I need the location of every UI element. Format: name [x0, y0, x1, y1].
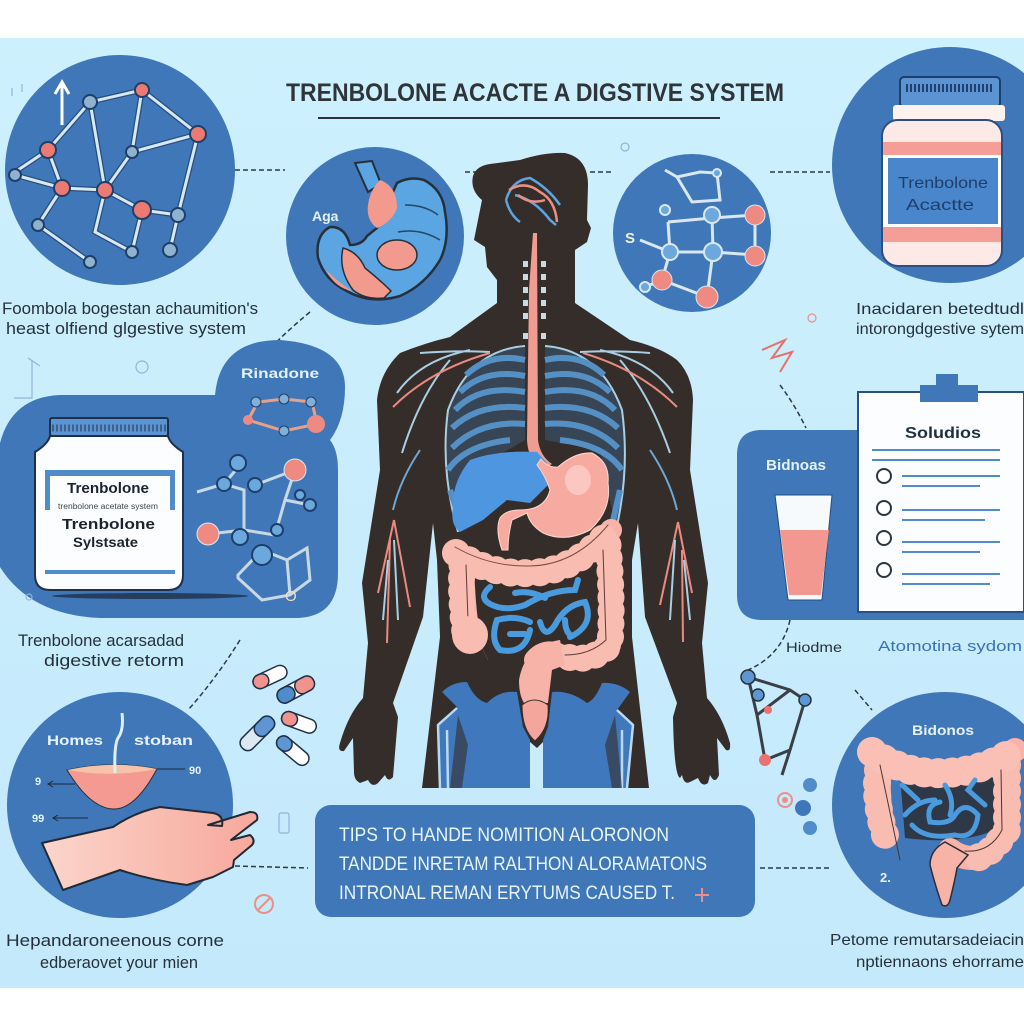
panel: intestine circle bottom right: Bidonos — [912, 722, 974, 738]
icon: brain — [506, 178, 560, 225]
connector lines — [188, 170, 872, 868]
decorative marks — [12, 84, 816, 833]
text: bottom right caption: nptiennaons ehorrame — [856, 954, 1024, 971]
neck vertebrae — [523, 261, 546, 339]
bottle label: trenbolone acetate system — [58, 502, 158, 511]
text: left caption: Trenbolone acarsadad — [18, 631, 184, 650]
esophagus — [527, 233, 552, 470]
panel: bottle circle top right — [832, 47, 1024, 283]
panel: hand circle bottom left — [7, 692, 257, 918]
panel: stomach circle: Aga — [312, 208, 339, 224]
bottle label: Trenbolone — [62, 516, 155, 533]
icon: molecule lower right — [741, 670, 811, 775]
text: bottom left caption: edberaovet your mien — [40, 953, 198, 972]
ribcage — [446, 346, 625, 532]
panel: bottle and molecules left: O — [285, 588, 297, 605]
shoulder and arm nerves — [378, 350, 692, 643]
text: right captions: Atomotina sydom — [878, 638, 1022, 655]
text: top right caption: intorongdgestive sytem — [856, 321, 1024, 338]
text: bottom left caption — [6, 931, 224, 972]
panel: molecule circle top left — [5, 55, 235, 285]
icon: zigzag — [762, 340, 792, 372]
panel: bottle circle top right: Acactte — [906, 197, 974, 214]
panel: molecule circle top centre-right — [613, 154, 771, 312]
text: right captions: Hiodme — [786, 639, 842, 655]
text: left caption — [18, 631, 184, 670]
liver — [452, 452, 550, 532]
icon: capsules — [237, 663, 318, 768]
large intestine — [455, 525, 611, 660]
panel: bottle and molecules left: Rinadone — [241, 365, 319, 381]
bottle label: Sylstsate — [73, 534, 138, 550]
panel: bottle and molecules left — [0, 340, 345, 618]
text: top left caption: Foombola bogestan achaumition's — [2, 299, 258, 318]
panel: molecule circle top centre-right: S — [625, 230, 635, 247]
gap between legs — [530, 742, 543, 788]
text: bottom left caption: Hepandaroneenous corne — [6, 931, 224, 950]
text: bottom right caption: Petome remutarsadeiacin — [830, 932, 1024, 949]
pelvis — [438, 682, 633, 788]
panel: tips box: TANDDE INRETAM RALTHON ALORAMATONS — [339, 854, 707, 875]
panel: bottle circle top right: Trenbolone — [898, 175, 988, 192]
panel: intestine circle bottom right — [832, 692, 1024, 918]
panel: tips box: TIPS TO HANDE NOMITION ALORONON — [339, 825, 669, 846]
title: TRENBOLONE ACACTE A DIGSTIVE SYSTEM — [286, 79, 784, 107]
clipboard — [858, 374, 1024, 612]
panel: tips box: INTRONAL REMAN ERYTUMS CAUSED T. — [339, 883, 675, 904]
text: left caption: digestive retorm — [44, 651, 184, 670]
panel: tips box — [315, 805, 755, 917]
panel: clipboard solutions right: Bidnoas — [766, 457, 826, 474]
panel: central body figure — [339, 153, 730, 788]
sigmoid colon — [519, 640, 565, 703]
panel: hand circle bottom left: stoban — [134, 732, 193, 748]
text: right captions — [786, 638, 1022, 655]
icon: small molecule and swirl — [778, 778, 817, 835]
panel: hand circle bottom left: 9 — [35, 776, 41, 788]
panel: hand circle bottom left: 99 — [32, 813, 44, 825]
text: top left caption: heast olfiend glgestive system — [6, 319, 246, 338]
clipboard: Soludios — [905, 425, 981, 442]
panel: intestine circle bottom right: 2. — [880, 870, 891, 885]
text: top right caption — [856, 301, 1024, 338]
panel: hand circle bottom left: Homes — [47, 732, 103, 748]
panel: stomach circle — [286, 147, 464, 325]
text: bottom right caption — [830, 932, 1024, 971]
text: top left caption — [2, 299, 258, 338]
small intestine — [484, 580, 588, 651]
stomach — [498, 453, 609, 550]
text: top right caption: Inacidaren betedtudl — [856, 301, 1024, 318]
icon: warning circle — [255, 895, 273, 913]
icon: glass — [775, 495, 832, 600]
panel: clipboard solutions right — [737, 374, 1024, 620]
bottle label — [35, 418, 248, 599]
bottle label: Trenbolone — [67, 480, 149, 497]
rectum — [522, 700, 548, 741]
panel: hand circle bottom left: 90 — [189, 765, 201, 777]
body silhouette — [339, 153, 730, 788]
